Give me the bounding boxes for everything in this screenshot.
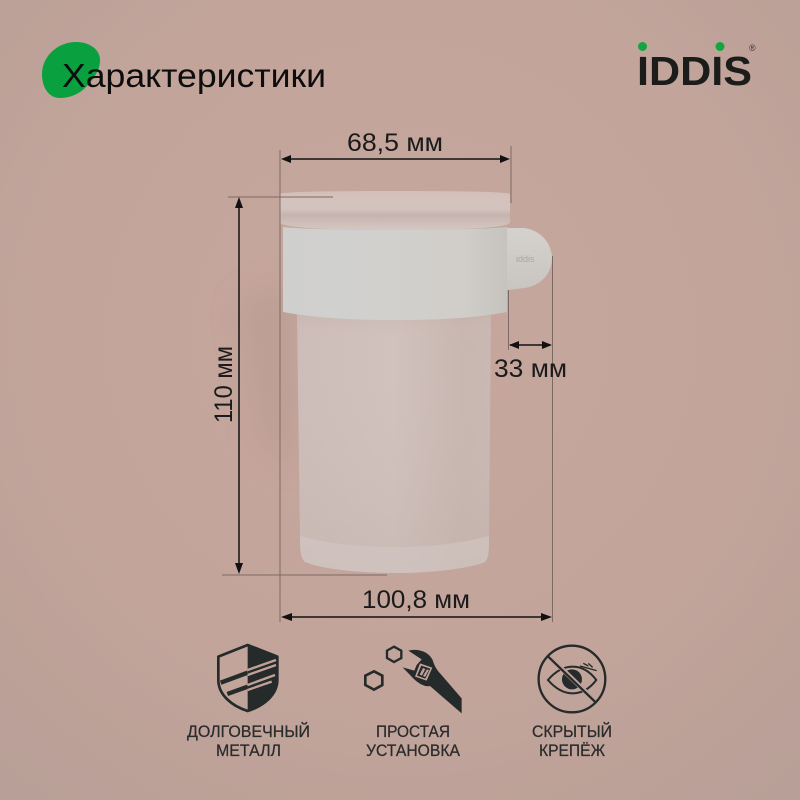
arrow: [281, 613, 552, 621]
label: ДОЛГОВЕЧНЫЙ: [187, 722, 310, 741]
product: glass holder: [240, 191, 552, 573]
label: 100,8 мм: [362, 586, 470, 614]
dimension: 33 мм: [494, 341, 567, 383]
feature: durable metal: [187, 645, 310, 760]
wall mount: [500, 228, 552, 291]
frosted glass body: [297, 312, 491, 573]
title text: Характеристики: [62, 57, 326, 94]
logo wordmark: IDDIS: [637, 48, 752, 94]
label: ПРОСТАЯ: [376, 723, 450, 741]
dimension: 100,8 мм: [281, 586, 552, 621]
mount engraved logo: iddis: [516, 254, 535, 264]
wall shadow: [240, 280, 295, 470]
label: 110 мм: [210, 346, 238, 423]
dimension: 110 мм: [210, 197, 243, 574]
registered mark: ®: [749, 43, 756, 53]
arrow: [235, 197, 243, 574]
label line 2: МЕТАЛЛ: [216, 742, 281, 760]
logo: IDDIS: [637, 42, 756, 94]
icon: shield: [218, 645, 277, 711]
icon: crossed eye: [539, 646, 605, 712]
green blob: [42, 42, 100, 98]
dimension: 68,5 мм: [281, 129, 510, 163]
label line 2: УСТАНОВКА: [366, 742, 460, 760]
logo green dots: [638, 42, 724, 51]
glass rim: [280, 191, 510, 230]
title: [42, 42, 326, 98]
label: 68,5 мм: [347, 129, 443, 157]
label: 33 мм: [494, 355, 567, 383]
arrow: [281, 155, 510, 163]
feature: easy installation: [365, 647, 462, 760]
label: СКРЫТЫЙ: [532, 722, 612, 741]
glass thick base: [300, 536, 489, 573]
dimension lines: [222, 146, 552, 622]
icon: wrench and nuts: [365, 647, 462, 713]
metal holder band: [283, 227, 507, 320]
label line 2: КРЕПЁЖ: [539, 742, 606, 760]
feature: hidden mount: [532, 646, 612, 760]
arrow: [509, 341, 552, 349]
